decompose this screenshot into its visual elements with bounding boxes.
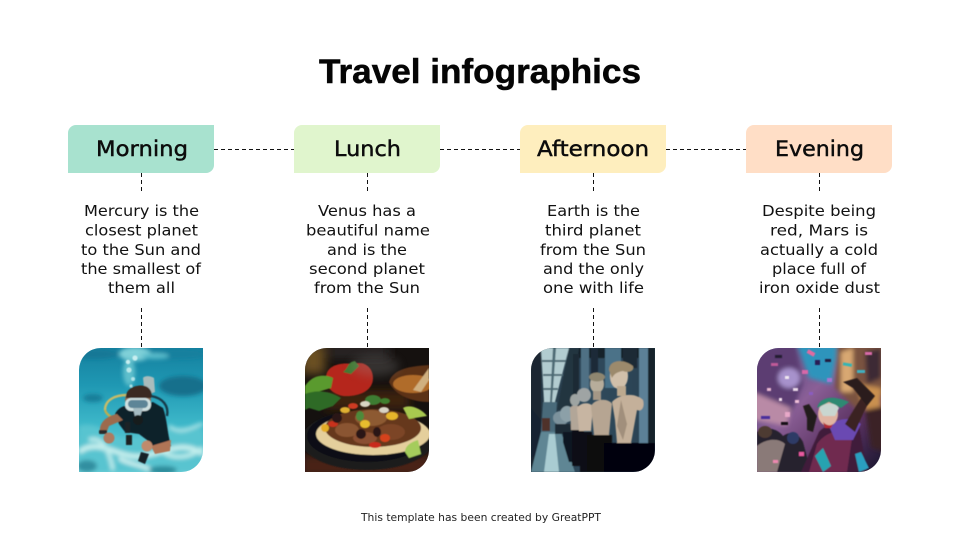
footer credit: This template has been created by GreatPPT bbox=[360, 512, 602, 524]
panel: evening bbox=[746, 125, 892, 472]
connector: afternoon to evening bbox=[666, 148, 746, 150]
title: Travel infographics bbox=[319, 53, 641, 91]
text: afternoon description: from the Sun bbox=[540, 241, 646, 259]
panel: afternoon bbox=[520, 125, 666, 472]
text: evening description: iron oxide dust bbox=[759, 279, 880, 297]
panel: morning bbox=[67, 125, 214, 474]
photo: fajita plate bbox=[305, 348, 429, 472]
text: evening description: actually a cold bbox=[760, 241, 878, 259]
text: lunch description: beautiful name bbox=[306, 222, 430, 240]
header: Morning: Morning bbox=[96, 137, 188, 161]
header: Lunch bbox=[294, 125, 440, 173]
connector: text to photo bbox=[366, 308, 368, 348]
header: Afternoon: Afternoon bbox=[537, 137, 649, 161]
text: evening description: red, Mars is bbox=[770, 222, 868, 240]
header: Evening: Evening bbox=[775, 137, 864, 161]
text: afternoon description: one with life bbox=[543, 279, 644, 297]
connector: text to photo bbox=[140, 308, 142, 348]
text: afternoon description: Earth is the bbox=[547, 202, 640, 220]
text: afternoon description: and the only bbox=[543, 260, 644, 278]
text: lunch description: from the Sun bbox=[314, 279, 420, 297]
connector: header to text bbox=[366, 173, 368, 192]
text: evening description bbox=[759, 202, 880, 297]
text: lunch description bbox=[306, 202, 430, 297]
text: morning description: closest planet bbox=[85, 222, 198, 240]
header: Evening bbox=[746, 125, 892, 173]
text: evening description: place full of bbox=[772, 260, 867, 278]
photo: scuba diver bbox=[79, 348, 203, 472]
header: Lunch: Lunch bbox=[334, 137, 401, 161]
text: lunch description: and is the bbox=[327, 241, 407, 259]
photo: gallery of marble busts bbox=[531, 348, 655, 472]
text: morning description: Mercury is the bbox=[84, 202, 199, 220]
connector: header to text bbox=[592, 173, 594, 192]
text: lunch description: Venus has a bbox=[318, 202, 416, 220]
header: Morning bbox=[68, 125, 214, 173]
header: Afternoon bbox=[520, 125, 666, 173]
connector: text to photo bbox=[592, 308, 594, 348]
connector: text to photo bbox=[818, 308, 820, 348]
text: afternoon description: third planet bbox=[545, 222, 641, 240]
text: morning description bbox=[81, 202, 202, 297]
text: lunch description: second planet bbox=[309, 260, 425, 278]
text: morning description: the smallest of bbox=[81, 260, 202, 278]
connector: morning to lunch bbox=[214, 148, 294, 150]
text: evening description: Despite being bbox=[762, 202, 876, 220]
connector: header to text bbox=[818, 173, 820, 192]
connector: lunch to afternoon bbox=[440, 148, 520, 150]
text: morning description: them all bbox=[108, 279, 175, 297]
connector: header to text bbox=[140, 173, 142, 192]
panel: lunch bbox=[294, 125, 440, 478]
text: morning description: to the Sun and bbox=[81, 241, 201, 259]
text: afternoon description bbox=[540, 202, 646, 297]
photo: carnival dancer with confetti bbox=[753, 344, 885, 472]
